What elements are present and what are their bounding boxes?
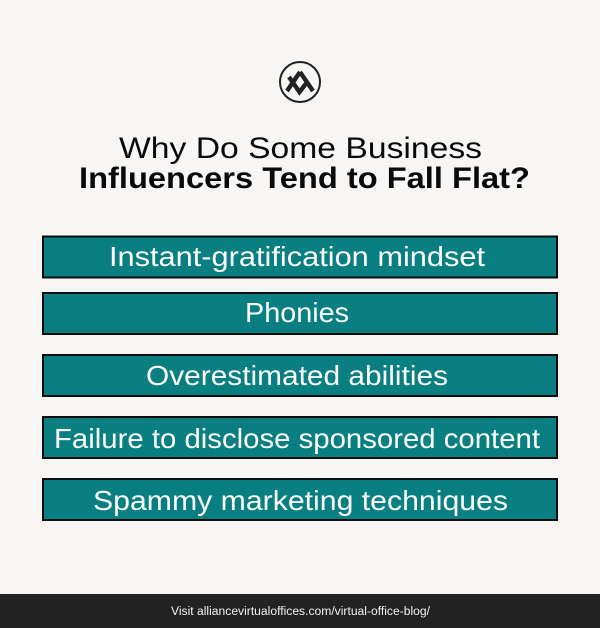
icon: logo [280,62,320,102]
title: Why Do Some Business [119,132,482,165]
list item: spammy marketing [43,479,557,520]
footer bar: Visit alliancevirtualoffices.com/virtual-office-blog/ [171,606,431,618]
title [79,132,530,195]
list item: phonies [43,293,557,334]
list item: phonies: Phonies [245,297,349,328]
list item: overestimated abilities [43,355,557,396]
footer bar [0,594,600,628]
list item: instant gratification: Instant-gratification mindset [109,241,485,272]
list item: spammy marketing: Spammy marketing techniques [93,485,508,516]
title: Influencers Tend to Fall Flat? [79,162,530,195]
list item: failure to disclose [43,417,557,458]
list item: failure to disclose: Failure to disclose sponsored content [54,423,540,454]
list item: overestimated abilities: Overestimated abilities [146,360,448,391]
list item: instant gratification [43,236,557,278]
